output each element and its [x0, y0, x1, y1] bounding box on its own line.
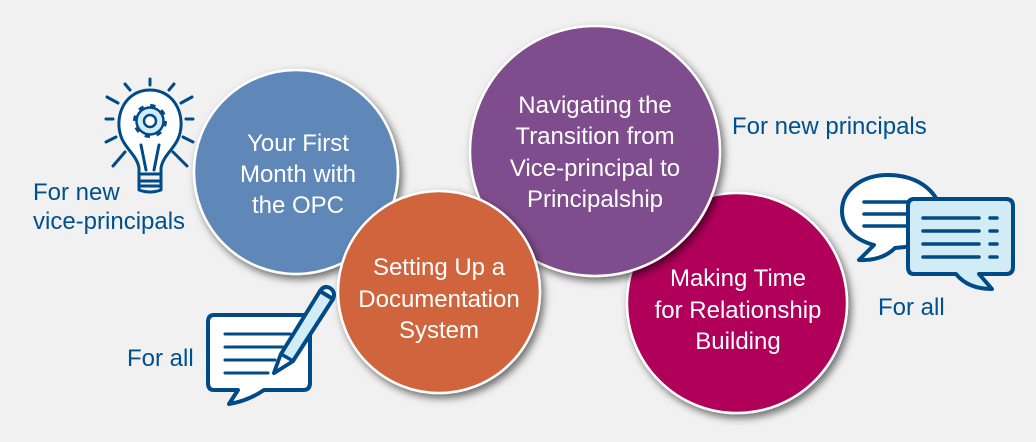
circle: navigating the transition: Transition from: [515, 123, 675, 150]
circle: navigating the transition: Vice-principal to: [510, 155, 680, 182]
icon: two speech bubbles: [842, 175, 1013, 289]
icon: light bulb with gear: [106, 79, 193, 192]
circle: your first month: [194, 70, 398, 274]
label: for all (right): For all: [878, 294, 945, 321]
label: for all (left): For all: [127, 345, 194, 372]
circle: making time: for Relationship: [655, 297, 821, 324]
circle: making time: [627, 193, 847, 413]
circle: making time: Making Time: [670, 265, 806, 292]
circle: navigating the transition: Navigating the: [518, 92, 672, 119]
circle: your first month: Month with: [240, 161, 356, 188]
label: for new principals: For new principals: [732, 113, 927, 140]
circle: your first month: Your First: [247, 130, 349, 157]
circle: your first month: the OPC: [252, 192, 344, 219]
circle: navigating the transition: Principalship: [527, 186, 663, 213]
circle: documentation system: Setting Up a: [373, 254, 506, 281]
label: for new vice-principals: vice-principals: [33, 208, 185, 235]
circle: making time: Building: [695, 328, 781, 355]
circle: navigating the transition: [470, 26, 720, 276]
circle: documentation system: [338, 191, 540, 393]
circle: documentation system: Documentation: [358, 286, 520, 313]
label: for new vice-principals: For new: [33, 179, 120, 206]
icon: note with pencil: [208, 287, 334, 404]
circle: documentation system: System: [399, 317, 479, 344]
